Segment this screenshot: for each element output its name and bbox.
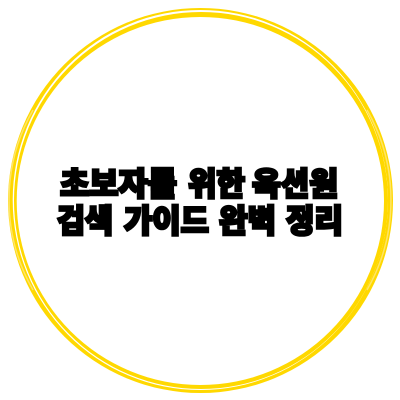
title: 옥션원 xyxy=(252,166,338,202)
title: 초보자를 xyxy=(60,166,177,202)
title: 가이드 xyxy=(124,203,209,239)
title xyxy=(57,166,343,239)
title: 위한 xyxy=(188,166,245,202)
title: 검색 xyxy=(57,203,113,239)
title: 완벽 xyxy=(219,203,276,239)
title: 정리 xyxy=(286,203,343,239)
